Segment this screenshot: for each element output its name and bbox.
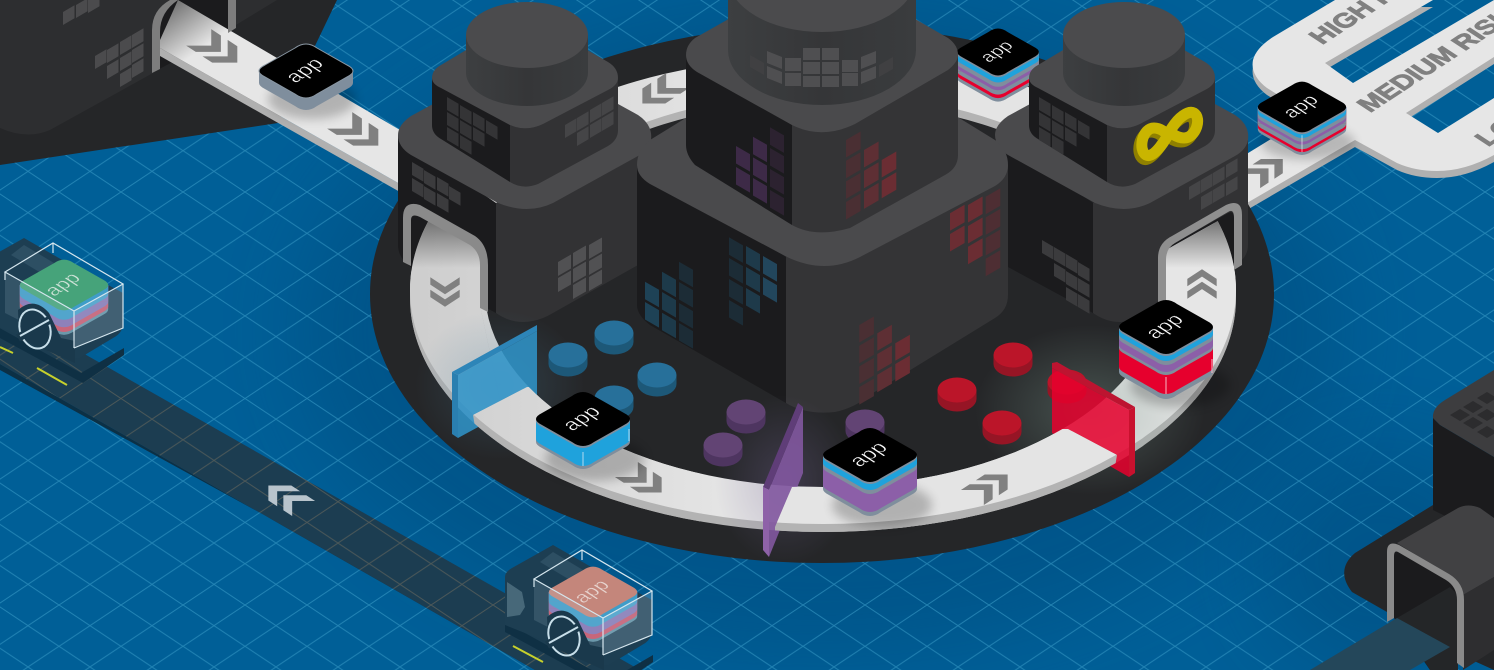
blue window grid 2	[729, 237, 777, 326]
arrow: left ring chevrons	[430, 277, 460, 307]
app stack: red: app	[1140, 311, 1189, 342]
arrow: chevrons after blue gate	[615, 462, 673, 500]
purple window grid	[736, 127, 784, 216]
blue window grid 1	[645, 262, 693, 349]
app stack: red	[1119, 300, 1230, 407]
purple tokens	[704, 400, 884, 466]
right tunnel	[1111, 203, 1242, 400]
ring segments in front of gates	[473, 387, 1117, 532]
red window grid lower	[859, 316, 910, 405]
icon: yellow infinity logo	[1139, 112, 1198, 160]
cargo: green app stack	[20, 260, 108, 335]
cargo: salmon app stack	[549, 567, 637, 642]
arch	[1158, 203, 1242, 302]
roof windows	[1450, 392, 1494, 438]
gate: purple	[763, 403, 803, 557]
arrow: belt chevrons lower	[327, 112, 391, 154]
red tokens	[938, 342, 1086, 444]
top-left building and platform	[0, 0, 337, 165]
road into tunnel	[1310, 618, 1450, 670]
app stack behind buildings: app	[974, 37, 1018, 65]
arch: top-left tunnel	[152, 0, 236, 73]
right tower	[995, 2, 1248, 322]
app tile on belt	[259, 44, 356, 119]
main circular platform	[370, 25, 1274, 563]
arch	[403, 204, 488, 312]
arrow: right ring chevrons	[1187, 269, 1217, 299]
road with lane dashes	[0, 328, 634, 670]
arrow: road chevrons	[257, 478, 315, 516]
left tunnel	[403, 204, 488, 400]
blue tokens	[548, 320, 676, 419]
risk lanes: high, medium, low	[1238, 0, 1494, 214]
gate: red	[1052, 362, 1135, 477]
cylinder windows	[767, 48, 876, 87]
app stack: blue	[536, 392, 645, 481]
arrow: chevrons before red gate	[961, 467, 1019, 505]
arch	[1387, 544, 1464, 668]
arrow: belt chevrons	[186, 29, 250, 71]
cargo: salmon app stack: app	[569, 576, 615, 607]
red window grid upper	[950, 188, 1000, 276]
vehicle 1: green app in transit	[0, 238, 124, 383]
app stack behind buildings	[957, 29, 1039, 102]
middle tier	[686, 0, 958, 232]
app stack: blue: app	[557, 403, 606, 434]
app stack: purple: app	[844, 439, 893, 470]
arrow: lane chevrons	[1238, 152, 1294, 188]
app tile on belt: app	[280, 55, 329, 86]
cargo: green app stack: app	[40, 269, 86, 300]
vehicle 2: salmon app in transit	[505, 545, 653, 670]
app stack at risk lanes: app	[1278, 91, 1324, 122]
gate: blue	[452, 325, 537, 438]
left tower	[398, 2, 651, 322]
bottom-right building with tunnel	[1310, 370, 1494, 670]
red window grid middle	[846, 132, 896, 220]
conveyor ring	[410, 56, 1236, 532]
gate glows	[415, 310, 1205, 565]
central tower	[637, 0, 1008, 413]
app stack at risk lanes	[1258, 82, 1355, 160]
arrow: back chevrons	[631, 73, 689, 111]
app stack: purple	[823, 428, 932, 527]
cylinder side windows	[750, 55, 893, 77]
conveyor: top-left belt	[152, 0, 400, 192]
